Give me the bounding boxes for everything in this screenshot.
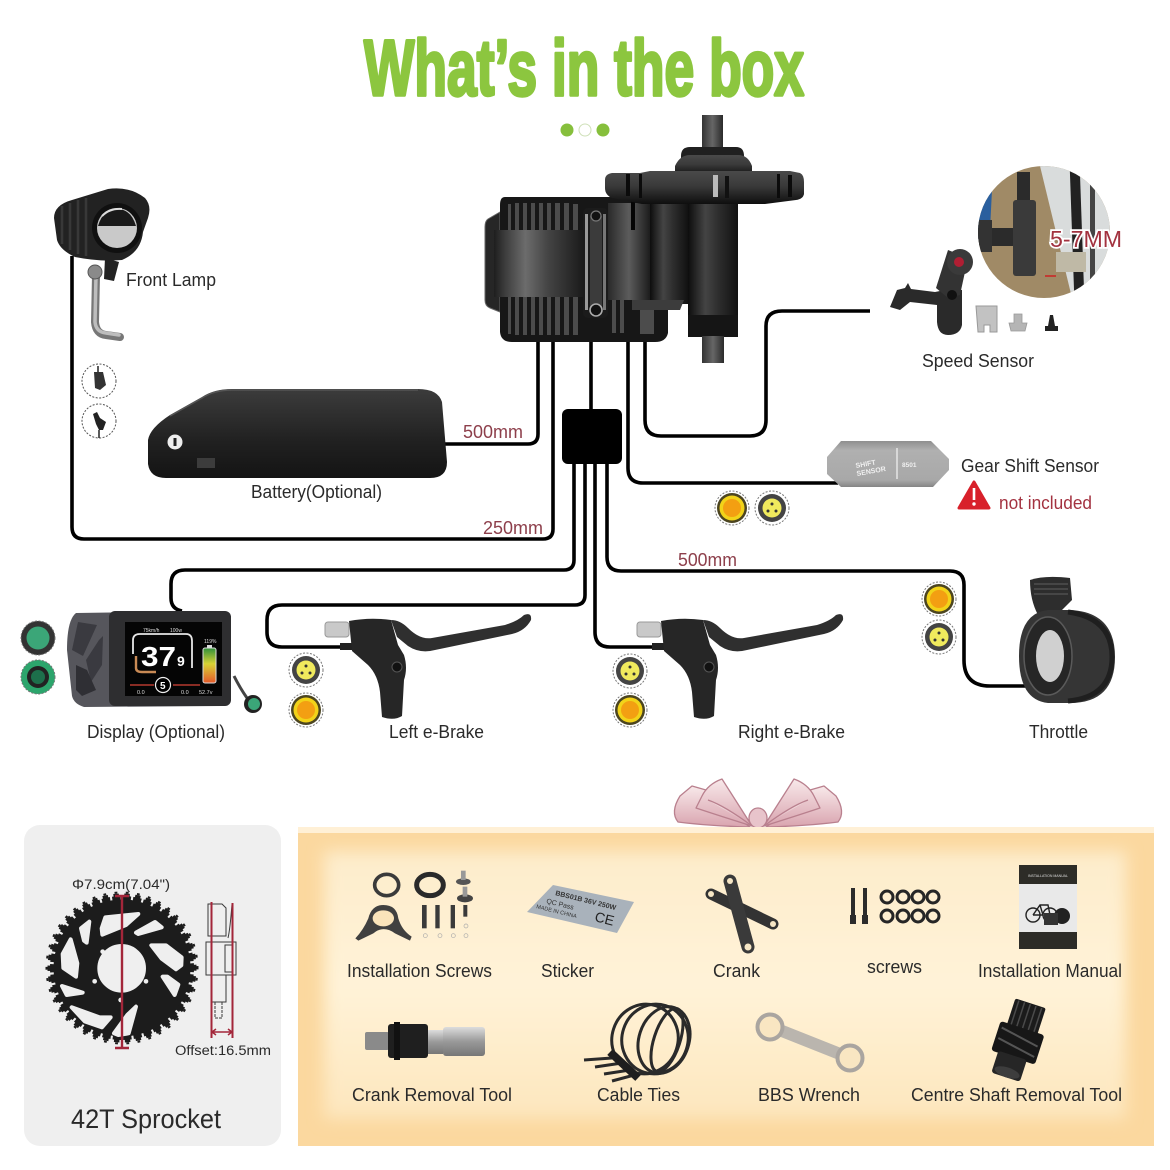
icon: gear shift sensor: 8501 bbox=[902, 462, 917, 469]
icon: speed sensor bbox=[890, 249, 973, 335]
label: gear shift sensor: Gear Shift Sensor bbox=[961, 456, 1099, 476]
cable length label: lamp: 250mm bbox=[483, 518, 543, 538]
item: sticker: MADE IN CHINA bbox=[536, 904, 578, 920]
icon: display unit: 5 bbox=[160, 681, 166, 692]
icon: battery bbox=[148, 389, 447, 478]
item: installation manual: INSTALLATION MANUAL bbox=[1028, 874, 1068, 878]
label: speed sensor: Speed Sensor bbox=[922, 351, 1034, 371]
label: screws: screws bbox=[867, 957, 922, 977]
icon: display unit: 119% bbox=[204, 639, 217, 645]
icon: lamp connector plug bbox=[82, 364, 116, 398]
label: installation screws: Installation Screws bbox=[347, 961, 492, 981]
label: sticker: Sticker bbox=[541, 961, 594, 981]
icon: gear shift sensor: SENSOR bbox=[856, 466, 886, 478]
item: centre shaft removal tool bbox=[911, 996, 1122, 1105]
label: 42T sprocket: 42T Sprocket bbox=[71, 1104, 221, 1134]
warning label: not included: not included bbox=[999, 493, 1092, 513]
item: sticker bbox=[527, 885, 634, 981]
label: front lamp: Front Lamp bbox=[126, 270, 216, 290]
icon: display unit: 9 bbox=[177, 653, 185, 669]
cable length label: battery: 500mm bbox=[463, 422, 523, 442]
chart: offset side profile bbox=[206, 902, 236, 1038]
wiring harness bbox=[72, 256, 1026, 686]
item: installation manual bbox=[978, 865, 1122, 981]
icon: display unit: 0.0 bbox=[137, 690, 145, 696]
item: sticker: CE bbox=[593, 908, 616, 929]
icon: warning triangle bbox=[959, 482, 989, 508]
icon: lamp connector socket bbox=[82, 404, 116, 438]
icon: display unit bbox=[67, 611, 231, 707]
chart: sprocket drawing bbox=[46, 892, 198, 1048]
icon: display unit: 75km/h bbox=[143, 628, 160, 634]
mid-drive motor bbox=[485, 115, 804, 363]
item: cable ties bbox=[584, 996, 698, 1105]
item: crank bbox=[708, 878, 776, 981]
inset label: 5-7MM: 5-7MM bbox=[1050, 226, 1122, 252]
icon: black screw bbox=[1045, 315, 1058, 331]
label: left e-brake: Left e-Brake bbox=[389, 722, 484, 742]
title: What’s in the box bbox=[364, 23, 804, 112]
label: throttle: Throttle bbox=[1029, 722, 1088, 742]
controller junction box bbox=[562, 409, 622, 464]
icon: throttle bbox=[1019, 577, 1115, 703]
icon: display cable plug bbox=[234, 676, 262, 713]
item: installation screws bbox=[347, 871, 492, 981]
dimension label: diameter: Φ7.9cm(7.04") bbox=[72, 877, 170, 892]
label: installation manual: Installation Manual bbox=[978, 961, 1122, 981]
icon: gear shift sensor: SHIFT bbox=[855, 459, 877, 470]
connectors: throttle bbox=[922, 582, 956, 654]
icon: front lamp bbox=[54, 188, 149, 337]
icon: silver screw bbox=[1009, 314, 1027, 331]
label: battery: Battery(Optional) bbox=[251, 482, 382, 502]
icon: gear shift sensor bbox=[827, 441, 949, 487]
panel: 42T sprocket bbox=[24, 825, 281, 1146]
connectors: display bbox=[21, 621, 55, 694]
icon: display unit: 37 bbox=[141, 641, 176, 672]
item: sticker: BBS01B 36V 250W bbox=[555, 890, 617, 912]
item: screws bbox=[850, 888, 939, 977]
icon: left e-brake bbox=[325, 614, 531, 719]
title pagination dots bbox=[560, 124, 610, 136]
icon: right e-brake bbox=[637, 614, 843, 719]
label: centre shaft removal tool: Centre Shaft Removal Tool bbox=[911, 1085, 1122, 1105]
label: right e-brake: Right e-Brake bbox=[738, 722, 845, 742]
label: BBS wrench: BBS Wrench bbox=[758, 1085, 860, 1105]
label: crank: Crank bbox=[713, 961, 761, 981]
label: display: Display (Optional) bbox=[87, 722, 225, 742]
icon: display unit: 0.0 bbox=[181, 690, 189, 696]
cable length label: throttle: 500mm bbox=[678, 550, 737, 570]
connectors: left e-brake bbox=[289, 653, 323, 727]
panel: gift box accessories bbox=[298, 827, 1154, 1146]
label: crank removal tool: Crank Removal Tool bbox=[352, 1085, 512, 1105]
icon: sensor magnet sleeve bbox=[976, 306, 997, 332]
icon: display unit: 100w bbox=[170, 628, 182, 634]
icon: display unit: 52.7v bbox=[199, 690, 213, 696]
label: cable ties: Cable Ties bbox=[597, 1085, 680, 1105]
dimension label: offset: Offset:16.5mm bbox=[175, 1043, 271, 1058]
item: sticker: QC Pass bbox=[546, 898, 575, 912]
item: BBS wrench bbox=[758, 1014, 862, 1105]
inset photo: sensor gap bbox=[978, 166, 1110, 298]
item: crank removal tool bbox=[352, 1022, 512, 1105]
connectors: right e-brake bbox=[613, 654, 647, 727]
connectors: gear shift sensor bbox=[715, 491, 789, 525]
icon: gift bow bbox=[674, 779, 842, 828]
